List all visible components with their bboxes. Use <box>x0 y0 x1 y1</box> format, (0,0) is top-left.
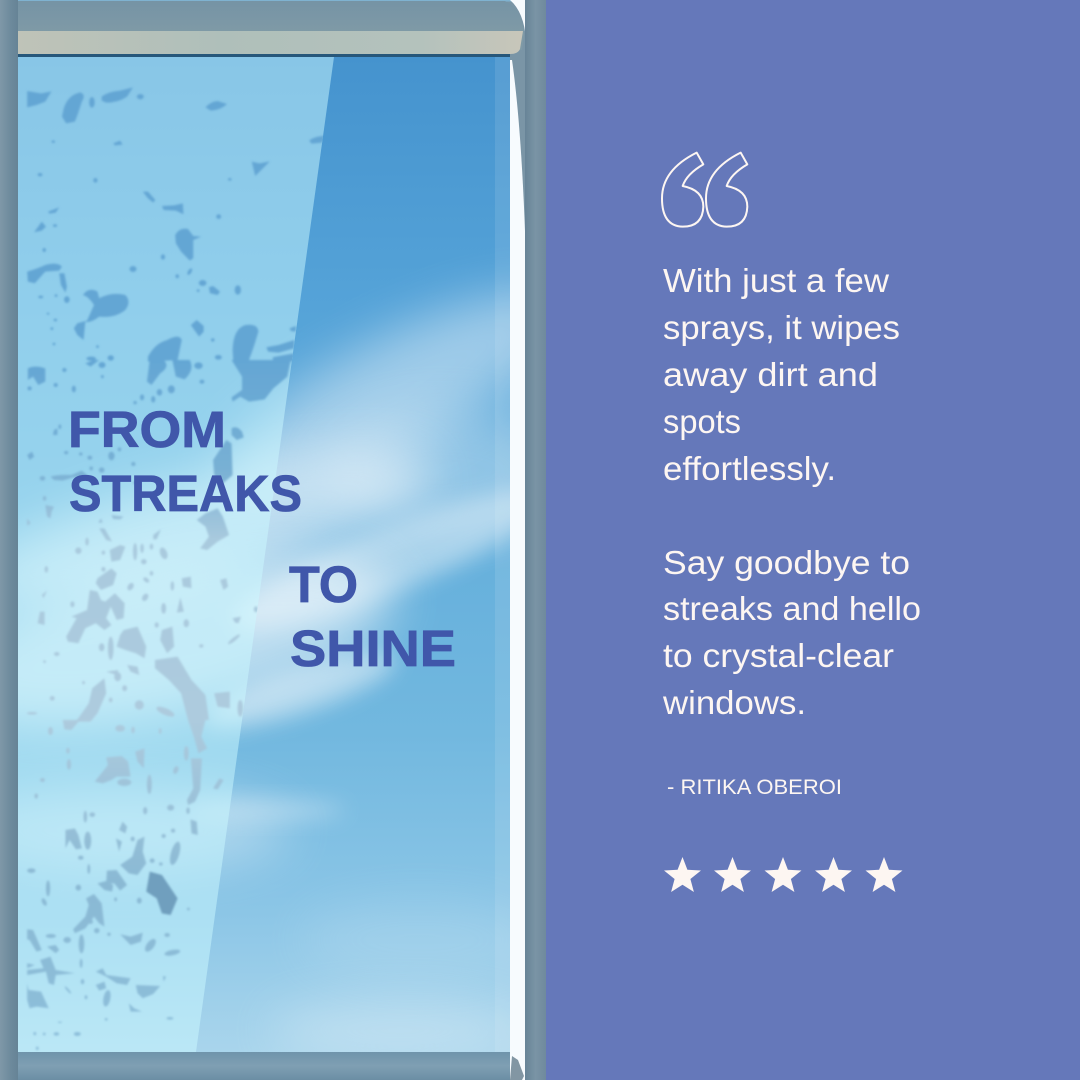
testimonial quote text: away dirt and <box>663 356 878 393</box>
testimonial quote text: windows. <box>662 684 806 721</box>
testimonial quote text: streaks and hello <box>663 590 921 627</box>
window frame <box>0 0 546 1080</box>
panel: window photo <box>0 0 584 1080</box>
white reveal strip <box>510 60 526 1080</box>
dirt spots <box>27 87 326 1050</box>
testimonial quote text: effortlessly. <box>663 450 836 487</box>
five star rating <box>664 857 902 892</box>
sky with clouds <box>18 57 510 1052</box>
lighter glass edge <box>495 57 510 1052</box>
heading: from streaks to shine: TO <box>289 556 358 613</box>
roller bar <box>18 31 523 54</box>
bottom sill <box>18 1052 510 1080</box>
author name: - RITIKA OBEROI <box>667 776 842 799</box>
icon: outlined quotation mark <box>662 153 747 227</box>
testimonial quote text <box>662 262 921 721</box>
testimonial quote text: With just a few <box>663 262 889 299</box>
heading: from streaks to shine: FROM <box>68 401 226 458</box>
top blind housing <box>18 1 524 50</box>
testimonial quote text: sprays, it wipes <box>663 309 900 346</box>
panel: purple testimonial background <box>546 0 1080 1080</box>
testimonial quote text: Say goodbye to <box>663 544 910 581</box>
heading: from streaks to shine: STREAKS <box>69 465 302 522</box>
heading: from streaks to shine <box>68 401 456 677</box>
frosted dirty half <box>18 57 334 1052</box>
testimonial quote text: spots <box>663 403 741 440</box>
heading: from streaks to shine: SHINE <box>290 620 456 677</box>
testimonial quote text: to crystal-clear <box>663 637 894 674</box>
